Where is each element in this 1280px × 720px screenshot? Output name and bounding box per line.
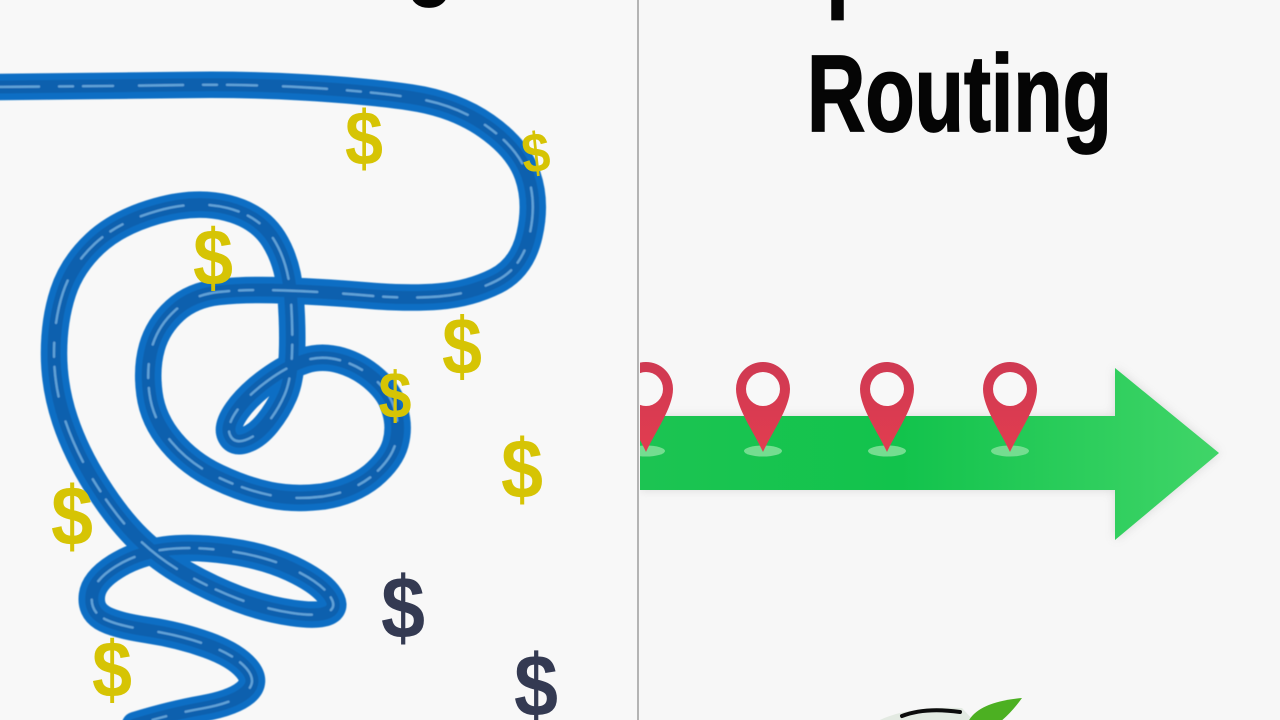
dollar sign 3: $ (193, 213, 233, 302)
panel: left background (0, 0, 638, 720)
dollar sign 4: $ (442, 302, 482, 392)
dollar signs: wasted cost (51, 96, 558, 720)
dollar sign 5: $ (378, 358, 412, 432)
location pins on route (619, 362, 1037, 456)
dollar sign 2: $ (519, 120, 553, 185)
green straight arrow (640, 368, 1219, 540)
dark dollar sign 9: $ (381, 558, 425, 657)
pin 4 (983, 362, 1037, 456)
pin 1 (640, 362, 673, 456)
icon: leaf and gauge top clipped at bottom (876, 698, 1022, 720)
pin 3 (860, 362, 914, 456)
heading: right title Routing: Routing (807, 33, 1112, 155)
dollar sign 1: $ (345, 96, 383, 182)
panel: right background (639, 0, 1280, 720)
winding blue road (0, 85, 533, 720)
pin 2 (736, 362, 790, 456)
dollar sign 8: $ (92, 625, 132, 714)
dollar sign 7: $ (51, 469, 93, 563)
dollar sign 6: $ (501, 422, 543, 516)
